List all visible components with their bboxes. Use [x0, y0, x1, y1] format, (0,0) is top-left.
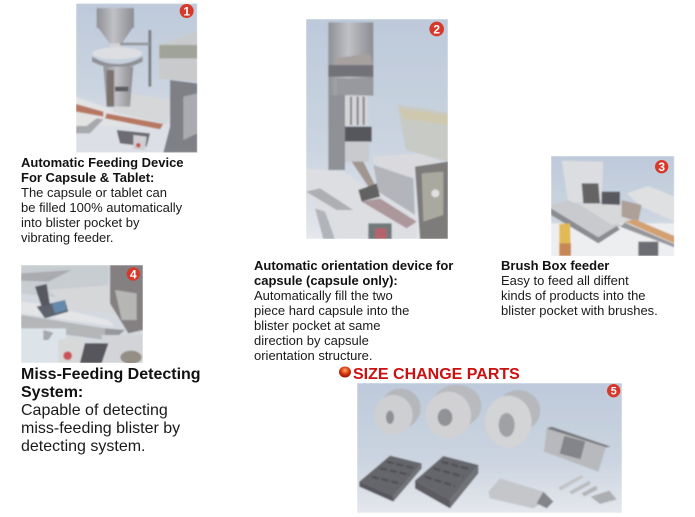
caption: miss-feeding detecting system: Capable of detecting	[21, 402, 168, 419]
caption: brush box feeder: Brush Box feeder	[501, 258, 609, 273]
caption: automatic orientation device: Automatically fill the two	[254, 288, 393, 303]
photo 4: miss-feeding detecting system	[21, 265, 143, 364]
caption: automatic orientation device: capsule (capsule only):	[254, 273, 398, 288]
badge 5: 5	[611, 386, 617, 398]
photo 2: automatic orientation device	[306, 19, 448, 239]
photo 5: size change parts	[357, 383, 622, 513]
badge 2	[429, 22, 444, 36]
caption: automatic feeding device: vibrating feeder.	[21, 230, 114, 245]
caption: brush box feeder: blister pocket with brushes.	[501, 303, 658, 318]
caption: brush box feeder	[501, 258, 658, 318]
photo 3: brush box feeder	[551, 156, 674, 257]
caption: miss-feeding detecting system: Miss-Feeding Detecting	[21, 366, 201, 383]
caption: miss-feeding detecting system	[21, 366, 201, 455]
badge 1	[180, 4, 194, 18]
caption: automatic feeding device: Automatic Feeding Device	[21, 155, 184, 170]
caption: automatic orientation device	[254, 258, 453, 363]
caption: automatic orientation device: piece hard capsule into the	[254, 303, 409, 318]
caption: automatic orientation device: orientation structure.	[254, 348, 373, 363]
caption: automatic orientation device: Automatic orientation device for	[254, 258, 453, 273]
caption: automatic orientation device: direction by capsule	[254, 333, 369, 348]
badge 2: 2	[433, 22, 440, 36]
caption: miss-feeding detecting system: detecting system.	[21, 438, 146, 455]
caption: automatic orientation device: blister pocket at same	[254, 318, 380, 333]
badge 4: 4	[130, 267, 137, 281]
caption: brush box feeder: Easy to feed all diffent	[501, 273, 629, 288]
caption: miss-feeding detecting system: miss-feeding blister by	[21, 420, 180, 437]
badge 5	[607, 384, 620, 398]
badge 1: 1	[183, 4, 190, 18]
caption: automatic feeding device: into blister pocket by	[21, 215, 140, 230]
caption: automatic feeding device: For Capsule & Tablet:	[21, 170, 154, 185]
caption: miss-feeding detecting system: System:	[21, 384, 83, 401]
caption: automatic feeding device	[21, 155, 184, 245]
badge 3: 3	[658, 160, 665, 174]
caption: automatic feeding device: be filled 100% automatically	[21, 200, 183, 215]
heading: size change parts: SIZE CHANGE PARTS	[353, 366, 520, 383]
icon: red ball bullet	[339, 366, 351, 378]
photo 1: automatic feeding device	[76, 3, 197, 153]
caption: automatic feeding device: The capsule or tablet can	[21, 185, 167, 200]
caption: brush box feeder: kinds of products into the	[501, 288, 646, 303]
